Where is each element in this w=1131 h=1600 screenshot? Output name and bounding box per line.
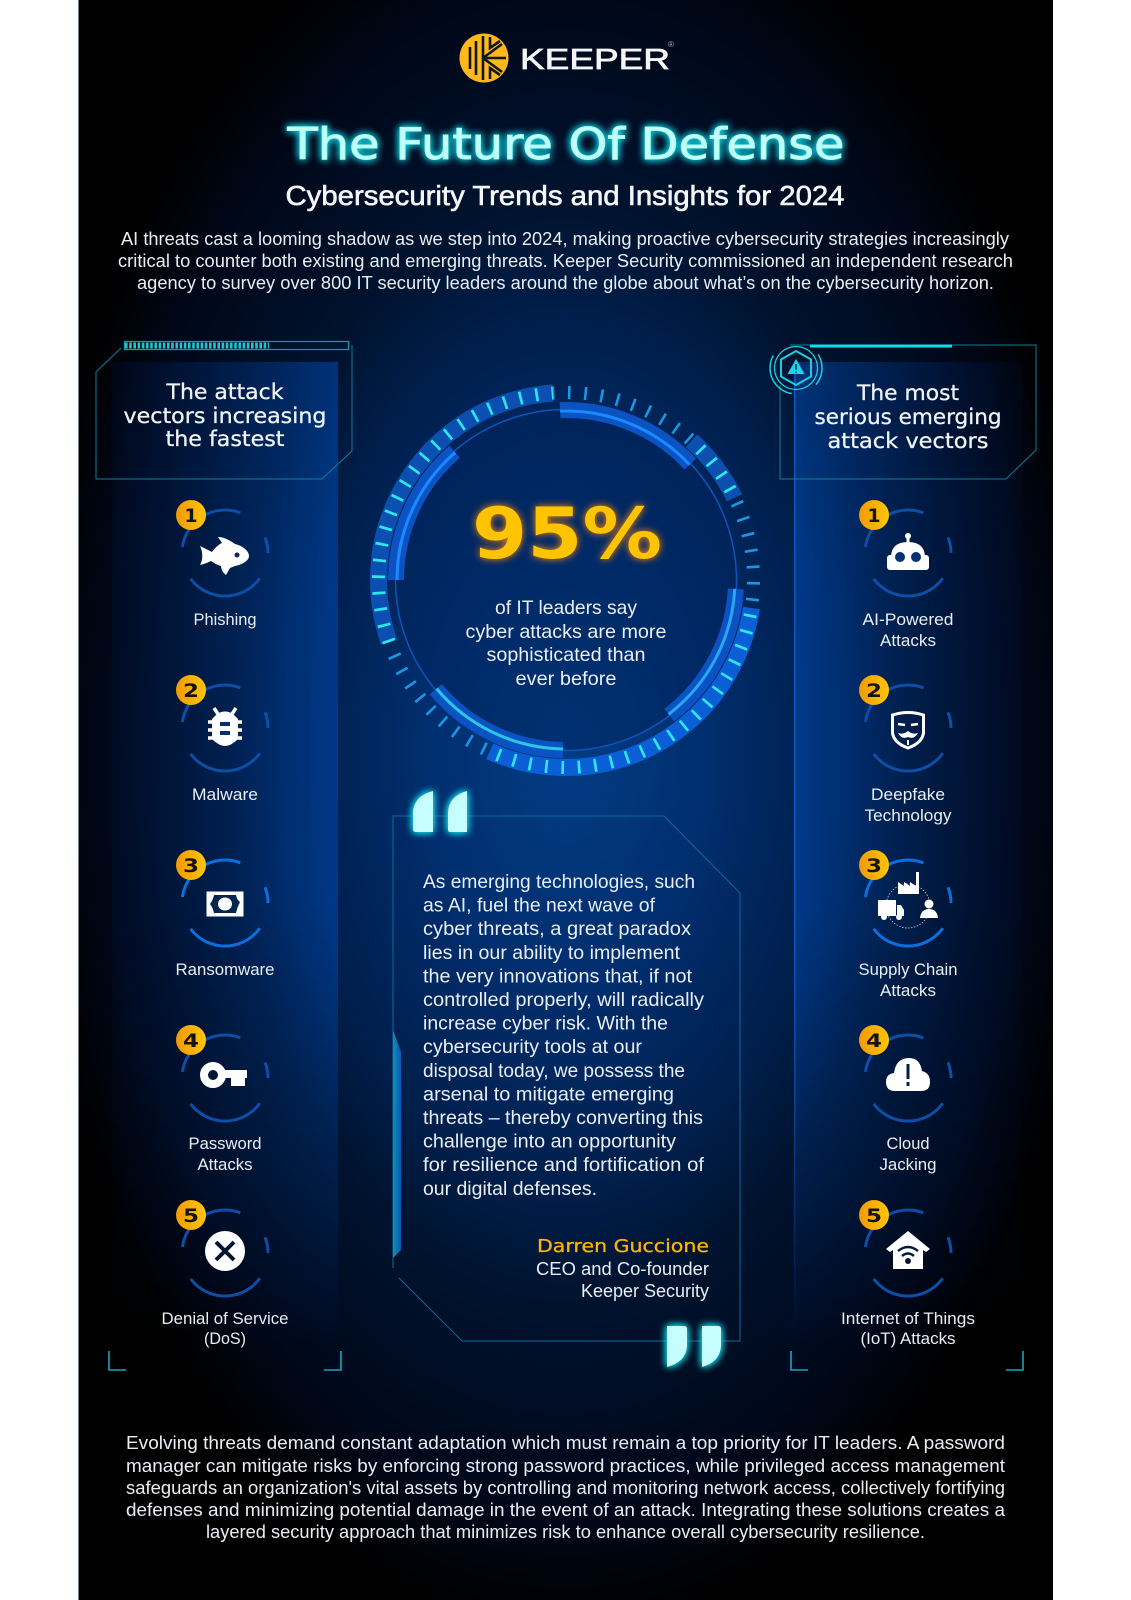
quote text: threats – thereby converting this <box>423 1107 703 1129</box>
ring <box>176 1029 274 1127</box>
stat caption: of IT leaders say <box>495 597 637 619</box>
intro paragraph <box>118 228 1013 293</box>
label: (IoT) Attacks <box>860 1329 956 1348</box>
quote text: cyber threats, a great paradox <box>423 918 691 940</box>
label: Denial of Service <box>162 1309 288 1328</box>
label <box>162 1309 288 1348</box>
heading <box>124 380 326 451</box>
ring <box>176 1204 274 1302</box>
icon: x circle <box>205 1231 245 1271</box>
heading: The attack <box>165 380 284 404</box>
stat caption: ever before <box>516 668 616 690</box>
opening quote mark <box>413 791 467 832</box>
icon: bug <box>208 708 242 746</box>
quote text: increase cyber risk. With the <box>423 1013 668 1035</box>
panel: attack vectors increasing the fastest <box>96 342 352 1370</box>
ring <box>859 1204 957 1302</box>
logo: Keeper: KEEPER <box>520 44 670 76</box>
outer bands <box>301 315 831 845</box>
heading: attack vectors <box>828 429 988 453</box>
item: Denial of Service <box>162 1200 288 1348</box>
item: Internet of Things <box>841 1200 975 1348</box>
icon: mask <box>892 712 924 748</box>
label: AI-Powered <box>862 610 954 629</box>
closing paragraph: defenses and minimizing potential damage in the event of an attack. Integrating these solutions creates a <box>126 1499 1006 1520</box>
ring <box>176 679 274 777</box>
label: Cloud <box>886 1134 930 1153</box>
label: Internet of Things <box>841 1309 975 1328</box>
ring <box>859 504 957 602</box>
panel edge line <box>794 362 796 1340</box>
logo: Keeper: ® <box>668 40 674 49</box>
badge 5 <box>176 1200 206 1230</box>
item: Ransomware <box>176 850 274 979</box>
label: Supply Chain <box>858 960 958 979</box>
label: Password <box>188 1134 262 1153</box>
intro paragraph: critical to counter both existing and emerging threats. Keeper Security commissioned an independent research <box>118 250 1013 271</box>
quote text: disposal today, we possess the <box>423 1060 685 1082</box>
icon: cloud alert <box>886 1058 930 1091</box>
gauge: 95% ring <box>370 384 760 776</box>
icon: alert hexagon <box>760 332 832 404</box>
badge 5: 5 <box>866 1205 882 1227</box>
panel: quote <box>393 791 740 1367</box>
subtitle: Cybersecurity Trends and Insights for 2024 <box>286 180 844 211</box>
quote text: cybersecurity tools at our <box>423 1036 643 1058</box>
badge 1: 1 <box>184 505 198 527</box>
badge 2: 2 <box>866 680 882 702</box>
attribution <box>536 1236 710 1301</box>
badge 1: 1 <box>867 505 881 527</box>
quote text: arsenal to mitigate emerging <box>423 1083 674 1105</box>
tick marks <box>377 391 755 769</box>
closing paragraph <box>126 1432 1006 1542</box>
item: Supply Chain Attacks <box>858 850 958 1000</box>
label: Technology <box>864 806 952 825</box>
inner arcs <box>387 401 745 759</box>
heading frame <box>96 342 352 479</box>
quote text: as AI, fuel the next wave of <box>423 895 656 917</box>
item: Malware <box>176 675 274 804</box>
icon: fish <box>200 537 249 575</box>
label: Phishing <box>194 610 256 629</box>
stat caption: sophisticated than <box>486 644 646 666</box>
ring <box>176 504 274 602</box>
attribution: CEO and Co-founder <box>536 1258 709 1279</box>
label <box>864 785 952 825</box>
quote text: lies in our ability to implement <box>423 942 681 964</box>
heading: serious emerging <box>814 405 1002 429</box>
item: Cloud Jacking <box>859 1025 957 1174</box>
stat caption <box>466 597 666 690</box>
corner brackets <box>791 1351 1023 1370</box>
label: Attacks <box>880 631 936 650</box>
closing paragraph: Evolving threats demand constant adaptation which must remain a top priority for IT leaders. A password <box>126 1432 1005 1453</box>
heading: The most <box>856 381 959 405</box>
closing paragraph: manager can mitigate risks by enforcing strong password practices, while privileged access management <box>126 1455 1005 1476</box>
heading: vectors increasing <box>124 404 326 428</box>
attribution: Darren Guccione <box>537 1236 709 1257</box>
badge 3: 3 <box>183 855 199 877</box>
panel background <box>794 362 1022 1340</box>
label: Jacking <box>880 1155 936 1174</box>
label: (DoS) <box>204 1329 246 1348</box>
badge 3: 3 <box>866 855 882 877</box>
closing paragraph: layered security approach that minimizes risk to enhance overall cybersecurity resilience. <box>206 1521 925 1542</box>
intro paragraph: AI threats cast a looming shadow as we step into 2024, making proactive cybersecurity strategies increasingly <box>121 228 1010 249</box>
label <box>188 1134 262 1174</box>
quote text: our digital defenses. <box>423 1178 597 1200</box>
badge 4: 4 <box>183 1030 199 1052</box>
quote text: for resilience and fortification of <box>423 1154 705 1176</box>
quote text <box>423 871 705 1200</box>
ring <box>859 854 957 952</box>
badge 5: 5 <box>183 1205 199 1227</box>
label <box>841 1309 975 1348</box>
ring <box>859 679 957 777</box>
icon: supply chain <box>878 872 938 928</box>
ring <box>176 854 274 952</box>
item: Password Attacks <box>176 1025 274 1174</box>
label: Attacks <box>880 981 936 1000</box>
badge 2: 2 <box>183 680 199 702</box>
title: The Future Of Defense <box>286 119 844 170</box>
quote text: challenge into an opportunity <box>423 1131 676 1153</box>
badge 1 <box>859 500 889 530</box>
heading <box>814 381 1002 453</box>
label: Deepfake <box>871 785 945 804</box>
badge 2 <box>859 675 889 705</box>
heading: the fastest <box>166 427 284 451</box>
label <box>862 610 954 650</box>
badge 4 <box>176 1025 206 1055</box>
quote text: As emerging technologies, such <box>423 871 695 893</box>
stat caption: cyber attacks are more <box>466 621 666 643</box>
closing paragraph: safeguards an organization's vital assets by controlling and monitoring network access, collectively fortifying <box>126 1477 1005 1498</box>
quote frame <box>393 816 740 1341</box>
quote text: controlled properly, will radically <box>423 989 704 1011</box>
item: Phishing <box>176 500 274 629</box>
quote text: the very innovations that, if not <box>423 965 693 987</box>
item: Deepfake Technology <box>859 675 957 825</box>
label <box>880 1134 936 1174</box>
icon: banknote <box>206 892 244 916</box>
intro paragraph: agency to survey over 800 IT security leaders around the globe about what’s on the cybersecurity horizon. <box>137 272 994 293</box>
heading frame <box>780 345 1036 479</box>
ring <box>859 1029 957 1127</box>
label: Malware <box>192 785 258 804</box>
thin circle <box>396 410 736 750</box>
stat: 95%: 95% <box>472 493 662 575</box>
arc highlights <box>388 402 744 758</box>
panel: most serious emerging attack vectors <box>760 332 1036 1370</box>
gauge inner disc <box>396 410 736 750</box>
label: Ransomware <box>176 960 274 979</box>
label <box>858 960 958 1000</box>
badge 4 <box>859 1025 889 1055</box>
icon: key <box>204 1066 247 1086</box>
top accent bar <box>810 344 952 348</box>
icon: smart home <box>886 1231 930 1269</box>
label: Attacks <box>198 1155 252 1174</box>
left accent bar <box>393 1030 401 1258</box>
badge 5 <box>859 1200 889 1230</box>
corner brackets <box>109 1351 341 1370</box>
attribution: Keeper Security <box>581 1280 710 1301</box>
badge 3 <box>859 850 889 880</box>
icon: robot <box>887 533 929 570</box>
item: AI-Powered Attacks <box>859 500 957 650</box>
badge 4: 4 <box>866 1030 882 1052</box>
closing quote mark <box>667 1326 721 1367</box>
logo: Keeper <box>460 34 674 82</box>
panel background <box>112 362 338 1340</box>
